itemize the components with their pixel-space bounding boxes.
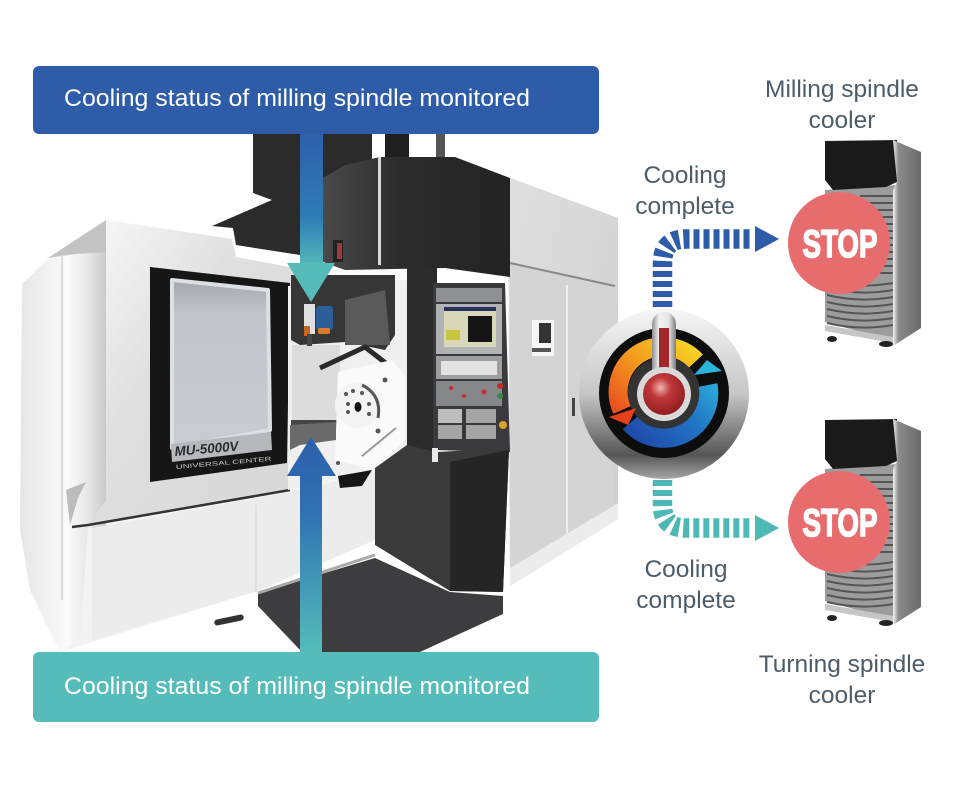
rotary table (335, 378, 396, 465)
upper spindle housing (212, 134, 445, 265)
main enclosure body (20, 220, 407, 652)
panel: top monitoring label (33, 66, 599, 134)
warm arc arrow (609, 347, 696, 425)
stop badge: STOP (802, 223, 878, 266)
machine tool illustration (20, 134, 618, 652)
label: turning spindle cooler: Turning spindle (759, 651, 925, 678)
icon: turning spindle cooler (788, 419, 921, 626)
label: milling spindle cooler: Milling spindle (765, 76, 919, 103)
top label text: Cooling status of milling spindle monitored (64, 85, 530, 112)
stop badge (788, 471, 890, 573)
icon: temperature dial (579, 309, 749, 479)
vertical column (323, 157, 510, 277)
cool arc arrow (630, 360, 722, 438)
window model plate (171, 432, 272, 462)
arrow: bottom monitoring arrow (287, 437, 336, 653)
label: milling spindle cooler: cooler (809, 107, 875, 134)
window glass (172, 280, 270, 448)
spindle head (304, 304, 333, 346)
bottom label text: Cooling status of milling spindle monitored (64, 673, 530, 700)
right cabinet (508, 177, 618, 586)
label: lower cooling complete: complete (636, 587, 736, 614)
thermometer (637, 312, 691, 421)
arrow: top monitoring arrow (287, 134, 335, 302)
floor platform (214, 555, 503, 652)
label: upper cooling complete: complete (635, 193, 735, 220)
model subtitle: UNIVERSAL CENTER (176, 457, 273, 471)
arrow: dashed blue to milling cooler (662, 226, 779, 307)
control panel (433, 283, 510, 452)
label: lower cooling complete: Cooling (644, 556, 728, 583)
panel screen (444, 307, 496, 347)
stop badge: STOP (802, 502, 878, 545)
stop badge (788, 192, 890, 294)
dark pillar (407, 268, 437, 483)
arrow: dashed teal to turning cooler (662, 480, 779, 541)
panel: bottom monitoring label (33, 652, 599, 722)
window frame (150, 267, 290, 482)
machining interior (288, 275, 407, 500)
label: upper cooling complete: Cooling (643, 162, 727, 189)
label: turning spindle cooler: cooler (809, 682, 875, 709)
icon: milling spindle cooler (788, 140, 921, 347)
model name: MU-5000V (174, 438, 240, 459)
lower pedestal (375, 445, 509, 592)
